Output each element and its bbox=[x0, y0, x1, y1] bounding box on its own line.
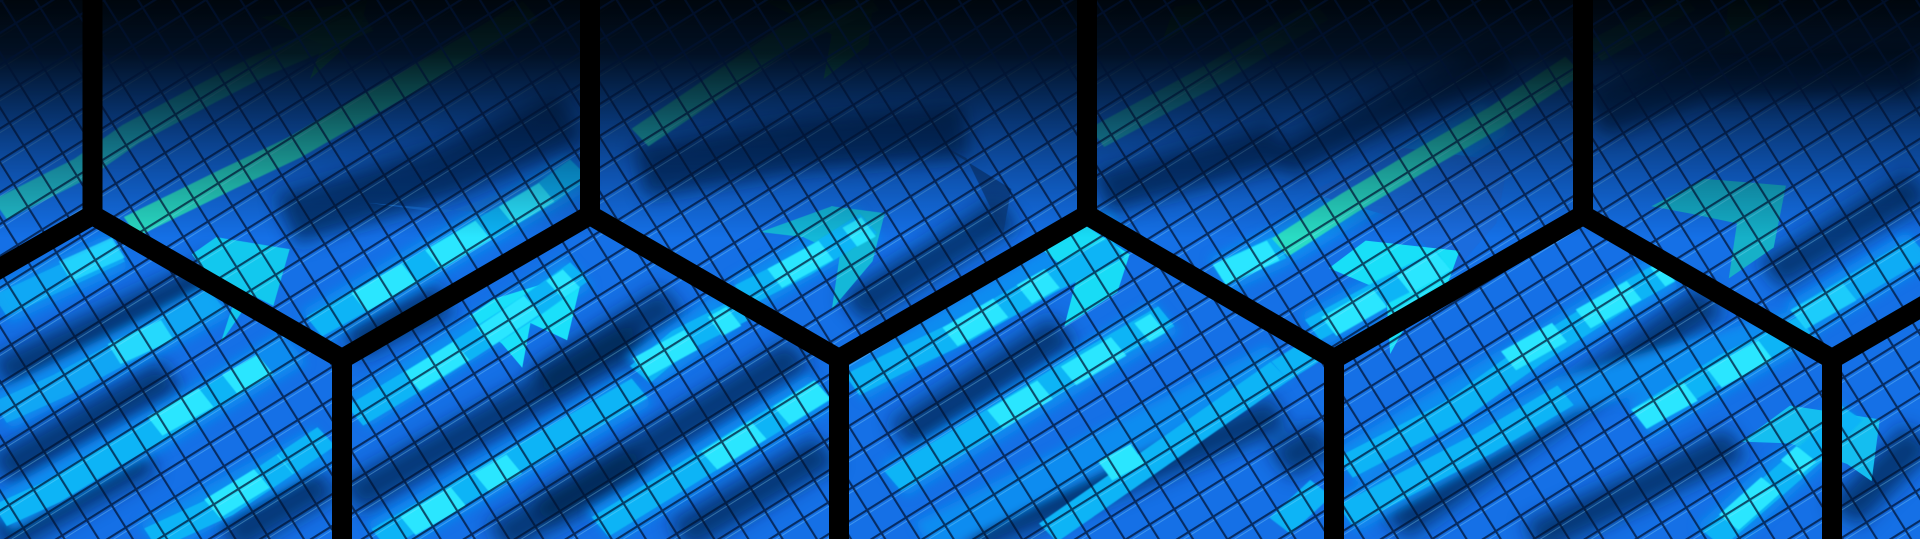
background: soft blue light bands bbox=[0, 117, 1920, 539]
arrows: chevron heads bbox=[192, 0, 1880, 481]
